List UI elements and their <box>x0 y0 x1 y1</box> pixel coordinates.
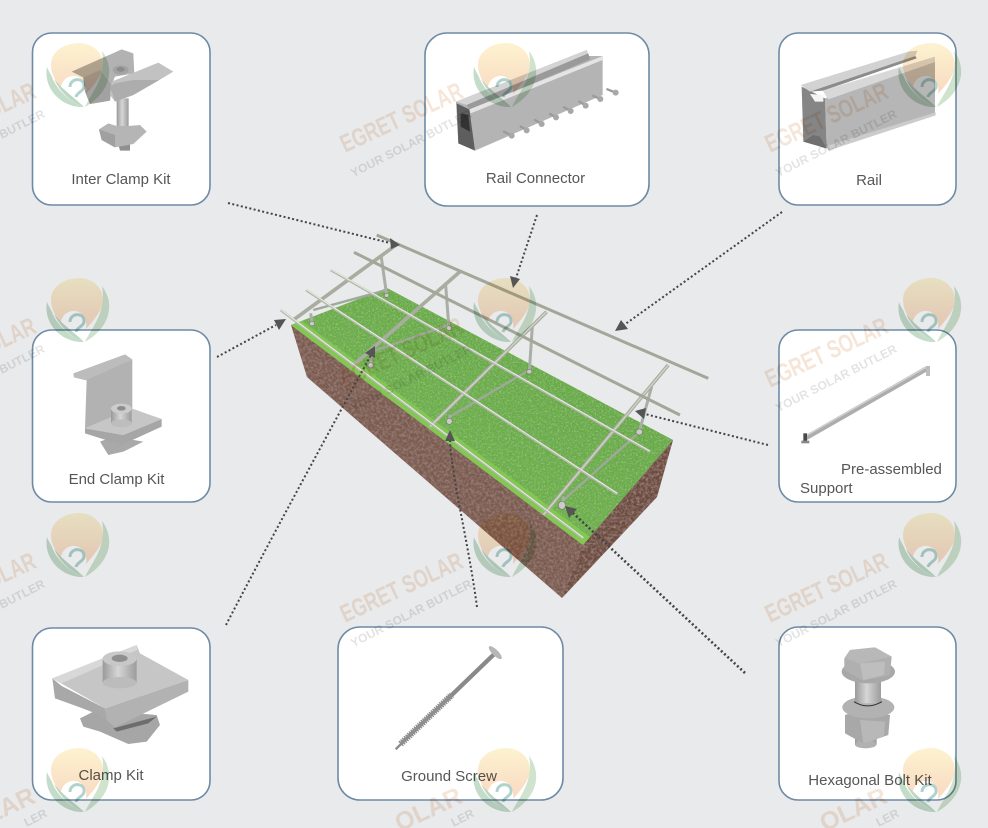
icon: inter clamp <box>72 49 173 151</box>
panel: clamp kit <box>32 628 210 800</box>
grass texture <box>285 285 680 550</box>
label: Hexagonal Bolt Kit <box>808 772 933 789</box>
central diagram: soil block with grass and mounting frame <box>281 235 708 605</box>
watermarks: YOUR SOLAR BUTLER <box>348 342 474 415</box>
watermarks: YOUR SOLAR BUTLER <box>773 342 899 415</box>
arrow: clamp kit to frame <box>226 346 375 625</box>
panel: end clamp kit <box>32 330 210 502</box>
watermarks: YOUR SOLAR BUTLER <box>773 577 899 650</box>
icon: support rail <box>801 366 930 443</box>
panel: hexagonal bolt kit <box>779 627 956 800</box>
soil texture <box>285 320 680 605</box>
arrow: ground screw to foot <box>445 430 477 607</box>
label: Inter Clamp Kit <box>71 171 171 188</box>
arrow: rail to top rail <box>615 212 782 331</box>
watermarks: EGRET SOLAR <box>761 77 892 158</box>
panel: rail connector <box>425 33 649 206</box>
label continued: Support <box>800 480 853 497</box>
label: Pre-assembled <box>841 461 942 478</box>
panel: rail <box>779 33 956 205</box>
watermarks: YOUR SOLAR BUTLER <box>773 107 899 180</box>
label: Clamp Kit <box>78 767 144 784</box>
icon: hex bolt <box>842 647 895 748</box>
arrow: hexagonal bolt kit to foot <box>565 506 745 673</box>
arrow: inter clamp kit to frame <box>228 203 400 249</box>
icon: ground screw <box>396 644 504 749</box>
watermarks: YOUR SOLAR BUTLER <box>348 577 474 650</box>
label: Ground Screw <box>401 768 497 785</box>
label: Rail Connector <box>486 170 585 187</box>
watermarks: EGRET SOLAR <box>336 77 467 158</box>
soil right face <box>562 440 673 598</box>
grass front edge <box>291 321 590 545</box>
icon: end clamp <box>73 354 162 455</box>
grass top <box>291 288 673 545</box>
watermarks: EGRET SOLAR <box>336 547 467 628</box>
mounting frame <box>281 235 708 538</box>
panel: ground screw <box>338 627 563 800</box>
icon: rail connector <box>456 50 619 151</box>
watermarks: YOUR SOLAR BUTLER <box>348 107 474 180</box>
watermarks: EGRET SOLAR <box>761 312 892 393</box>
panel: pre-assembled support <box>779 330 956 502</box>
soil left face <box>291 325 583 598</box>
panel: inter clamp kit <box>32 33 210 205</box>
label: End Clamp Kit <box>69 471 165 488</box>
label: Rail <box>856 172 882 189</box>
icon: rail <box>801 51 936 151</box>
watermarks: EGRET SOLAR <box>336 312 467 393</box>
watermarks: EGRET SOLAR <box>761 547 892 628</box>
arrow: end clamp kit to frame <box>217 319 286 357</box>
arrow: rail connector to rail <box>510 215 537 288</box>
arrow: pre-assembled support to frame <box>635 408 768 445</box>
icon: clamp <box>52 645 188 744</box>
